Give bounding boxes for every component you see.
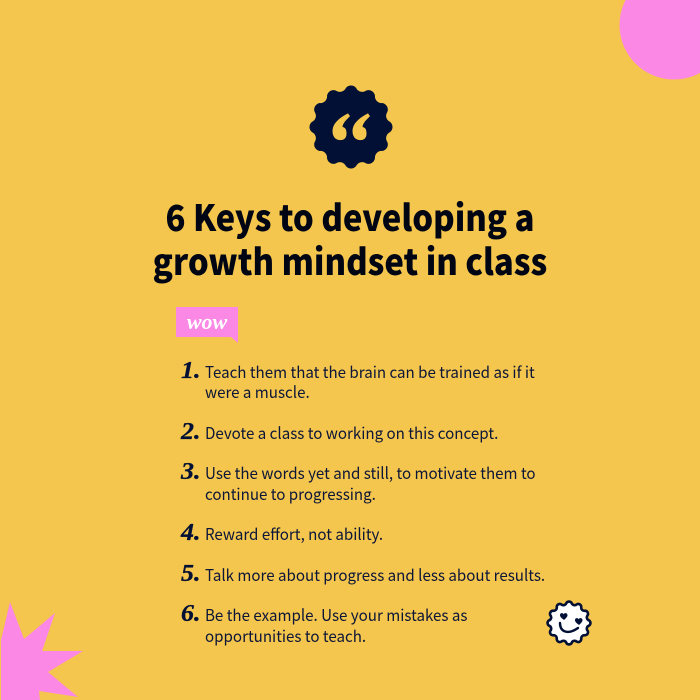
- list item 3: 3.: [181, 459, 200, 485]
- list item 6: 6.: [181, 601, 200, 627]
- decorative starburst: bottom left: [1, 602, 83, 700]
- list item 3: Use the words yet and still, to motivate them to: [205, 460, 536, 484]
- list item 1: 1.: [181, 358, 200, 384]
- icon: smiley badge: [546, 600, 592, 646]
- list item 6: [181, 601, 467, 646]
- list item 5: Talk more about progress and less about results.: [205, 562, 545, 586]
- list item 4: 4.: [181, 520, 200, 546]
- list item 1: [181, 358, 535, 403]
- list item 2: Devote a class to working on this concept.: [205, 420, 498, 444]
- list item 1: Teach them that the brain can be trained as if it: [205, 359, 535, 383]
- title: growth mindset in class: [153, 234, 547, 286]
- list item 1: were a muscle.: [205, 379, 310, 403]
- list item 3: [180, 459, 536, 504]
- title: 6 Keys to developing a: [166, 190, 535, 242]
- list item 6: opportunities to teach.: [205, 622, 366, 646]
- title: [153, 190, 547, 286]
- list item 4: Reward effort, not ability.: [205, 521, 383, 545]
- icon: quote badge: [310, 86, 392, 168]
- callout: wow speech bubble: wow: [187, 308, 227, 334]
- list item 2: 2.: [181, 419, 200, 445]
- list item 6: Be the example. Use your mistakes as: [205, 602, 467, 626]
- list item 5: 5.: [181, 561, 200, 587]
- list item 3: continue to progressing.: [205, 480, 376, 504]
- callout: wow speech bubble: [176, 307, 238, 343]
